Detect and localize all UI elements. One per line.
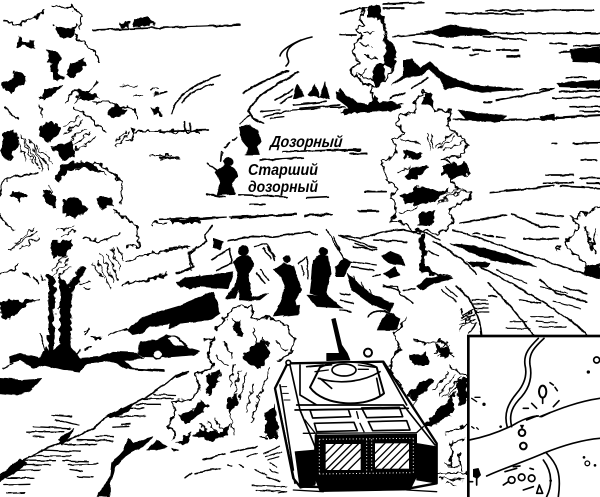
label: Дозорный: Дозорный: [268, 133, 344, 151]
engine grille frame: [315, 434, 417, 478]
grass base: [10, 345, 163, 372]
label: Старший дозорный: Старший: [248, 162, 318, 179]
trunks: [48, 267, 86, 353]
deck panels: [310, 407, 410, 432]
soldier 3: [307, 247, 343, 308]
lane hatch: [3, 394, 175, 493]
left large tree: [0, 5, 200, 353]
ridge behind soldiers: [172, 214, 332, 241]
inset map: [468, 336, 600, 497]
bush right of tank: [390, 310, 477, 485]
soldier 2: [273, 255, 302, 317]
tank: [275, 318, 437, 492]
dashed route between scouts: [221, 137, 237, 161]
hatched bushes between soldiers: [255, 230, 345, 283]
soldiers group: [170, 214, 400, 330]
ground lines under scouts: [160, 149, 387, 219]
roads: [469, 398, 600, 497]
soldier 1: [225, 246, 268, 301]
centre far tree: [340, 6, 402, 115]
foliage outline: [0, 5, 200, 283]
distant hill ridge: [392, 59, 523, 93]
turret: [310, 362, 384, 403]
background: far landscape and horizon: [93, 3, 600, 239]
foliage: [382, 92, 470, 235]
cannon: [327, 318, 350, 361]
label: Старший дозорный: дозорный: [248, 179, 318, 196]
right bush: [557, 207, 600, 278]
foliage shadow blobs: [2, 25, 127, 257]
tracks rear: [295, 443, 437, 492]
trench cut: [170, 273, 393, 328]
right edge of lane: [97, 437, 178, 497]
background road from upper left: [280, 37, 312, 66]
mid-field dashes: [340, 143, 600, 239]
river: [506, 338, 544, 427]
patrol scouts and ground lines: [160, 115, 387, 219]
background: road and terrain, upper centre: [160, 71, 393, 158]
roadside trench and rocks, left centre: [0, 300, 287, 497]
right tree: [382, 92, 470, 277]
near hill line: [453, 115, 600, 121]
trunk: [420, 233, 452, 277]
road and field, right side: [340, 230, 597, 335]
scout: старший дозорный: [207, 157, 237, 195]
small bush: [170, 225, 232, 273]
label: Старший дозорный: [248, 162, 318, 196]
lane: left verge: [0, 372, 188, 475]
foliage hatching: [10, 92, 128, 287]
hull silhouette: [275, 362, 437, 488]
hatched plates: [326, 444, 361, 470]
left track band: [275, 365, 315, 483]
small lines beside trunk: [80, 86, 200, 349]
grass clump near tank: [252, 447, 287, 493]
scout: дозорный: [239, 115, 261, 155]
rocks on ground: [138, 335, 200, 357]
rocks: [368, 311, 395, 317]
thin bush branches right of tree: [177, 247, 200, 283]
road: [243, 71, 298, 123]
bush left of tank: [168, 305, 295, 443]
rivets: [319, 438, 413, 474]
map symbols: [468, 357, 600, 493]
rear deck: [295, 363, 435, 445]
